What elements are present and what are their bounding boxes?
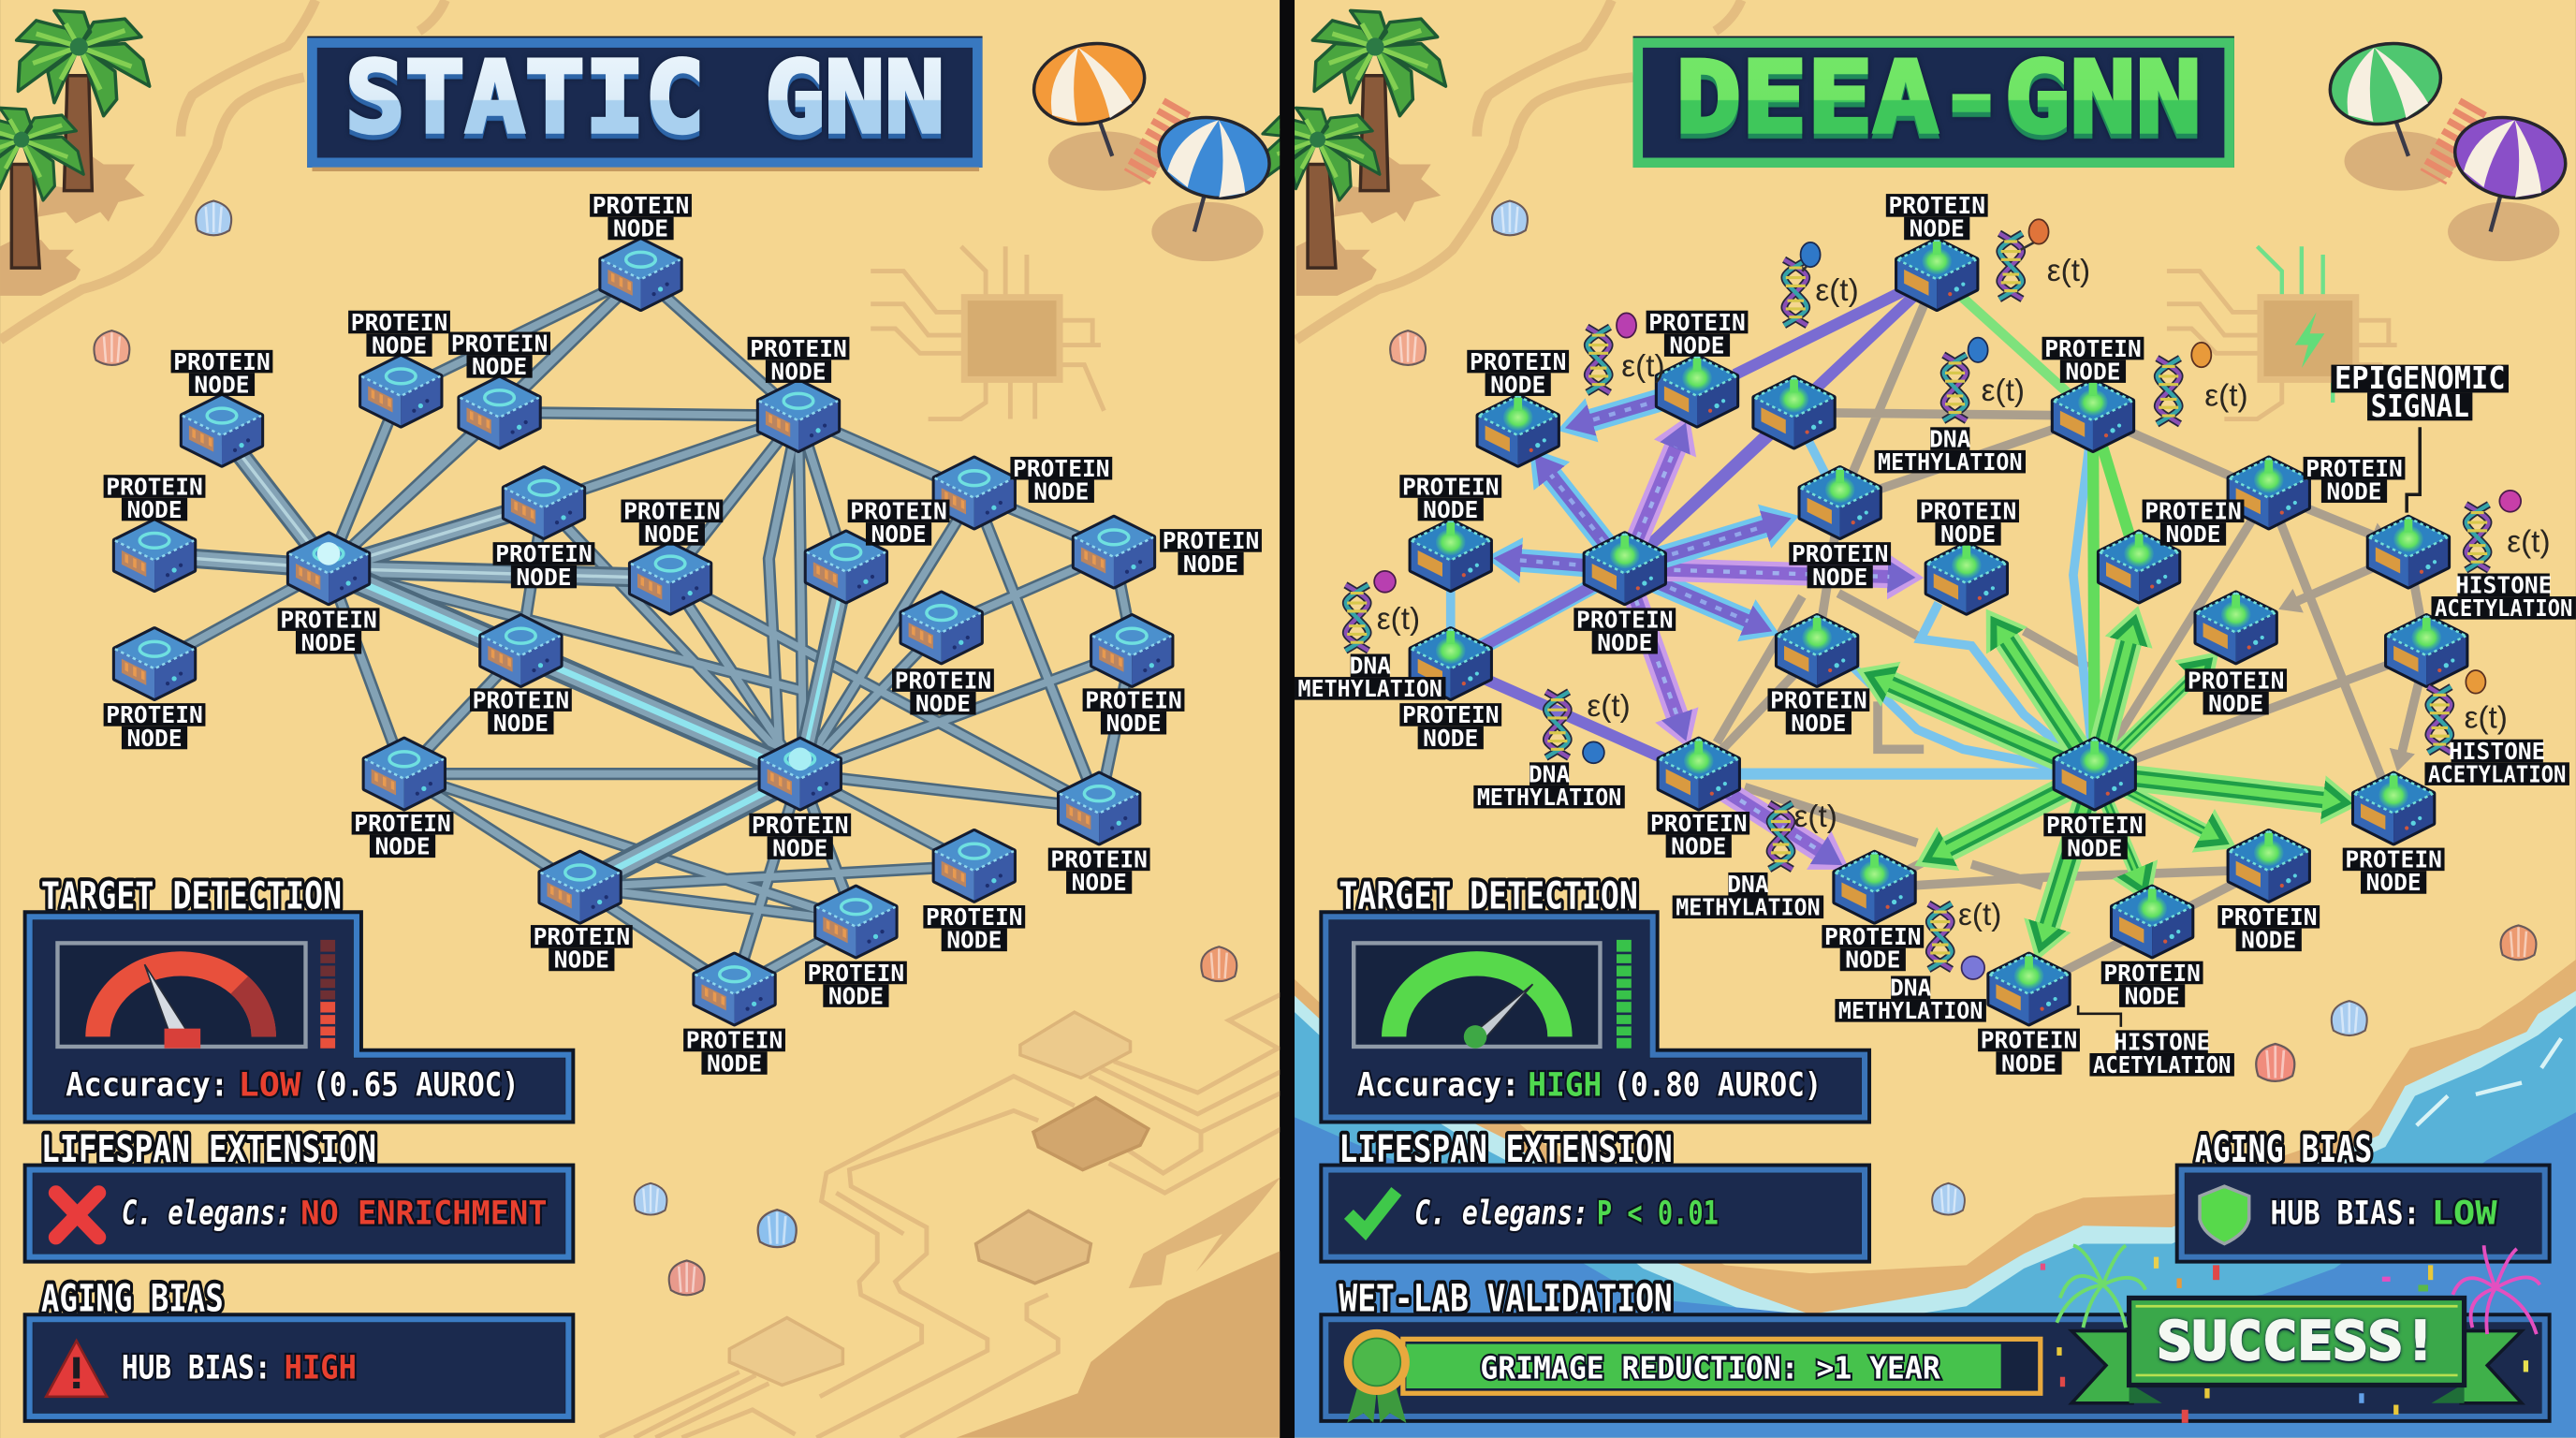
icon: warning triangle [46, 1341, 107, 1397]
node: right 14 [1767, 616, 1869, 737]
node: left 5: PROTEIN [750, 335, 847, 362]
circuit board traces left bottom [600, 994, 1281, 1438]
node: left 21: NODE [946, 927, 1002, 954]
network edges right: green links [1937, 274, 2139, 774]
text: elegans result: P < 0.01 [1597, 1194, 1719, 1232]
shells right [1390, 200, 2536, 1215]
node: left 12 [1075, 518, 1262, 587]
node: left 9: NODE [644, 521, 699, 548]
arrow: green to lower left [1947, 774, 2095, 849]
epigenomic marker: DNA 1: ε(t) [1815, 273, 1859, 308]
node: right 20: PROTEIN [1824, 923, 1922, 950]
panel: lifespan extension left [28, 1168, 570, 1258]
arrow: violet to top node [1625, 447, 1676, 568]
node: right 19 [2343, 774, 2445, 896]
node: right 9: PROTEIN [1920, 498, 2016, 525]
epigenomic marker: DNA 10 with histone label: ε(t) [2507, 525, 2551, 560]
palm trees left [0, 10, 150, 296]
node: left top: PROTEIN [593, 192, 689, 219]
icon: shield [2200, 1186, 2249, 1244]
node: left 23: NODE [707, 1049, 762, 1077]
label: histone acetylation lower: ACETYLATION [2093, 1051, 2231, 1078]
title banner: DEEA-GNN [1633, 37, 2234, 168]
text: hub bias low: HUB BIAS: [2271, 1194, 2420, 1232]
node: left 3: NODE [372, 331, 427, 359]
node: right 20: NODE [1845, 946, 1900, 974]
panel background: left sand [0, 0, 1280, 1438]
heading: lifespan extension left: LIFESPAN EXTENSION [41, 1127, 376, 1171]
epigenomic marker: DNA 3 [1587, 313, 1665, 392]
node: left 14 [470, 616, 572, 737]
arrow: green to left node [1889, 683, 2095, 774]
node: right 15 [2185, 594, 2287, 717]
text: hub bias high: HUB BIAS: [122, 1348, 271, 1387]
icon: green check [1349, 1191, 1397, 1231]
ocean: foam [1295, 990, 2576, 1438]
epigenomic marker: DNA 3: ε(t) [1621, 349, 1665, 384]
gauge frame [1354, 943, 1600, 1047]
node: left 17 [352, 740, 453, 860]
node: right 15: PROTEIN [2188, 667, 2284, 694]
node: left 15 [892, 594, 994, 717]
gauge arc [1382, 951, 1573, 1036]
node: right 7: NODE [1423, 496, 1478, 523]
node: left hub B [749, 740, 851, 861]
node: left 21: PROTEIN [926, 903, 1023, 931]
node: right 13 [1399, 629, 1501, 752]
node: right 5 [2042, 335, 2144, 450]
node: left 22: PROTEIN [808, 960, 904, 987]
node: right 2: NODE [1490, 371, 1545, 398]
arrow: violet to bottom node [1625, 568, 1677, 716]
network edges right: blue links [1451, 413, 2095, 774]
node: left 14: NODE [493, 710, 549, 737]
node: right 22: NODE [2125, 982, 2180, 1009]
accuracy text: Accuracy: [66, 1066, 228, 1105]
node: right 23: PROTEIN [1981, 1027, 2077, 1054]
node: left 21 [923, 831, 1025, 954]
bracket: epigenomic signal pointer [2407, 427, 2420, 513]
node: right 17: NODE [1671, 833, 1726, 860]
network edges left: thin links [154, 274, 1134, 990]
accuracy text: Accuracy: [1357, 1066, 1519, 1105]
progress bar track [1403, 1339, 2041, 1393]
ocean: shoreline wet sand [1295, 960, 2576, 1438]
epigenomic marker: DNA 1 [1784, 242, 1859, 325]
node: right 10: NODE [2326, 478, 2382, 506]
node: left 16 [1083, 616, 1184, 737]
icon: red cross [56, 1193, 98, 1238]
label: histone acetylation lower [2089, 1028, 2234, 1078]
label: epigenomic signal: EPIGENOMIC [2334, 360, 2505, 396]
epigenomic marker: DNA 10 with histone label: HISTONE [2455, 572, 2552, 599]
node: left 5 [748, 335, 849, 450]
node: right 13: PROTEIN [1402, 701, 1500, 728]
node: right 17: PROTEIN [1650, 810, 1748, 837]
node: right 22 [2101, 888, 2203, 1009]
node: right 10 [2230, 455, 2405, 527]
node: right 11 [2100, 498, 2244, 601]
arrow: green down right [2095, 774, 2136, 871]
panel divider [1280, 0, 1295, 1438]
right sand tracks [1296, 0, 1741, 340]
epigenomic marker: DNA 11 with histone label [2424, 670, 2569, 787]
node: left 15: PROTEIN [895, 667, 991, 694]
text: elegans result: NO ENRICHMENT [300, 1194, 547, 1232]
progress bar fill [1406, 1344, 2001, 1388]
epigenomic marker: DNA 11 with histone label: ACETYLATION [2428, 760, 2566, 787]
node: right top [1886, 192, 1988, 309]
node: left 20: PROTEIN [534, 923, 630, 950]
epigenomic marker: DNA 6 with methylation label: ε(t) [1377, 602, 1420, 637]
node: left 3 [348, 309, 450, 426]
arrow: green to upper-left node [2006, 639, 2095, 774]
panel: target detection right [1325, 916, 1866, 1119]
node: right hub B [2043, 740, 2145, 861]
epigenomic marker: DNA 9 with methylation label: METHYLATION [1838, 997, 1983, 1024]
panel: aging bias left [28, 1318, 570, 1418]
arrow: purple outer-left branch [1590, 399, 1662, 420]
node: left 13: PROTEIN [106, 701, 203, 728]
node: right 21 [2217, 831, 2320, 954]
node: left hub A: PROTEIN [280, 606, 377, 633]
left corner: sand wisps [1129, 1177, 1281, 1288]
node: left 9: PROTEIN [623, 498, 721, 525]
node: right 20 [1822, 853, 1924, 974]
node: right 22: PROTEIN [2103, 960, 2201, 987]
node: left 9 [621, 498, 723, 613]
label: histone acetylation lower: HISTONE [2114, 1028, 2210, 1055]
node: left 2 [171, 348, 272, 465]
ocean: wave highlights [2417, 1038, 2561, 1125]
bracket: histone acetylation pointer [2078, 1005, 2121, 1027]
text: elegans result: C. elegans: [122, 1194, 291, 1232]
heading: aging bias left: AGING BIAS [41, 1277, 224, 1321]
node: right 9: NODE [1940, 521, 1996, 548]
epigenomic marker: DNA 7 with methylation label [1473, 689, 1631, 811]
node: right 17 [1647, 740, 1749, 860]
epigenomic marker: DNA 8 with methylation label: METHYLATION [1676, 894, 1821, 921]
node: left 20 [531, 853, 633, 974]
node: right 10: PROTEIN [2305, 455, 2403, 482]
node: right hub A: NODE [1597, 629, 1652, 656]
gauge hub [1464, 1025, 1486, 1049]
arrow: green up [2095, 640, 2130, 774]
node: right 6 [1789, 468, 1891, 591]
node: left 13: NODE [126, 725, 183, 752]
epigenomic marker: DNA 11 with histone label: HISTONE [2449, 738, 2545, 765]
node: left hub B: NODE [772, 834, 827, 861]
node: left 12: PROTEIN [1163, 527, 1259, 554]
arrow: violet toward lower node [1699, 774, 1821, 851]
node: left 19: NODE [1072, 869, 1127, 896]
arrow: green to upper right [2095, 677, 2193, 774]
node: right 3: PROTEIN [1648, 309, 1746, 336]
node: right 9 [1917, 498, 2019, 613]
node: right top: PROTEIN [1888, 192, 1985, 219]
node: left 2: NODE [194, 371, 250, 398]
node: left 7: NODE [126, 496, 183, 523]
node: right 2 [1467, 348, 1569, 465]
shells left [94, 200, 1237, 1295]
beach umbrellas right [2322, 34, 2573, 261]
node: right 23 [1978, 955, 2080, 1077]
node: right 21: NODE [2241, 927, 2296, 954]
circuit chip background right [2167, 246, 2400, 419]
epigenomic marker: DNA 8 with methylation label [1673, 800, 1837, 921]
arrow: green to right node [2095, 774, 2324, 800]
accuracy text: (0.80 AUROC) [1613, 1066, 1822, 1105]
epigenomic marker: DNA 6 with methylation label: DNA [1350, 653, 1391, 680]
gauge needle [145, 964, 191, 1036]
node: left 7: PROTEIN [106, 473, 203, 500]
node: left 17: PROTEIN [354, 810, 451, 837]
gauge arc low end [230, 976, 276, 1036]
gauge frame [57, 943, 305, 1047]
node: right 14: NODE [1791, 710, 1846, 737]
panel: lifespan extension right [1325, 1168, 1866, 1258]
node: right 7: PROTEIN [1402, 473, 1500, 500]
epigenomic marker: DNA 2 [1999, 219, 2090, 299]
icon: medal [1344, 1329, 1410, 1423]
node: left 4 [448, 330, 550, 447]
heading: target detection left: TARGET DETECTION [41, 874, 342, 918]
title banner: DEEA-GNN: DEEA-GNN [1676, 39, 2202, 154]
epigenomic marker: DNA 9 with methylation label: ε(t) [1958, 898, 2001, 932]
node: left hub A [278, 534, 379, 656]
epigenomic marker: DNA 4 with methylation label: METHYLATION [1878, 448, 2022, 476]
epigenomic marker: DNA 2: ε(t) [2047, 254, 2090, 288]
node: left 16: PROTEIN [1085, 686, 1182, 713]
node: left 16: NODE [1105, 710, 1162, 737]
gauge needle [1467, 984, 1532, 1038]
node: left 10 [935, 455, 1112, 527]
node: right 11: PROTEIN [2144, 498, 2242, 525]
epigenomic marker: DNA 8 with methylation label: DNA [1727, 871, 1769, 898]
arrow: purple to upper-left node [1551, 475, 1625, 568]
node: left 10: NODE [1033, 478, 1089, 506]
ribbon: success tails [2071, 1331, 2522, 1403]
epigenomic marker: DNA 4 with methylation label [1875, 338, 2026, 476]
node: right 5: PROTEIN [2044, 335, 2142, 362]
node: right 3 [1647, 309, 1748, 426]
node: right 12 [2369, 518, 2448, 587]
node: right top: NODE [1910, 215, 1965, 242]
epigenomic marker: DNA 7 with methylation label: METHYLATION [1477, 784, 1621, 811]
heading: aging bias right: AGING BIAS [2195, 1127, 2372, 1171]
left corner: wet sand [956, 1251, 1281, 1438]
epigenomic marker: DNA 5: ε(t) [2204, 378, 2248, 413]
node: left hub B: PROTEIN [752, 812, 849, 839]
node: right 2: PROTEIN [1470, 348, 1566, 375]
accuracy text: HIGH [1528, 1066, 1602, 1105]
node: left 10: PROTEIN [1013, 455, 1110, 482]
node: right 19: PROTEIN [2345, 846, 2442, 873]
panel: aging bias right [2180, 1168, 2546, 1258]
epigenomic marker: DNA 10 with histone label [2431, 491, 2576, 622]
gauge arc [85, 951, 276, 1036]
left sand tracks [0, 0, 446, 340]
heading: lifespan extension right: LIFESPAN EXTENSION [1339, 1127, 1673, 1171]
node: right hub A [1573, 534, 1676, 656]
text: elegans result: C. elegans: [1414, 1194, 1588, 1232]
node: left 2: PROTEIN [173, 348, 271, 375]
node: left 23: PROTEIN [686, 1027, 783, 1054]
node: left 4: PROTEIN [451, 330, 548, 358]
epigenomic marker: DNA 4 with methylation label: DNA [1929, 425, 1971, 452]
node: left 20: NODE [554, 946, 609, 974]
node: right hub B: NODE [2067, 834, 2122, 861]
node: left 6: PROTEIN [495, 540, 593, 567]
node: left 15: NODE [915, 690, 971, 717]
epigenomic marker: DNA 7 with methylation label: ε(t) [1587, 689, 1631, 724]
text: hub bias high: HIGH [285, 1348, 357, 1387]
node: right 11: NODE [2165, 521, 2221, 548]
node: left 14: PROTEIN [473, 686, 569, 713]
node: right 5: NODE [2065, 358, 2121, 385]
node: right 23: NODE [2001, 1049, 2056, 1077]
node: left 11 [807, 498, 949, 601]
text: hub bias low: LOW [2431, 1194, 2498, 1232]
epigenomic marker: DNA 5 [2157, 343, 2248, 424]
arrow: blue to upper-right node [1625, 526, 1766, 568]
ocean: deep water [1295, 1112, 2576, 1438]
network edges right: purple links [1451, 274, 1937, 774]
epigenomic marker: DNA 9 with methylation label: DNA [1890, 975, 1932, 1002]
epigenomic marker: DNA 9 with methylation label [1835, 898, 2001, 1024]
node: right 13: NODE [1423, 725, 1478, 752]
epigenomic marker: DNA 6 with methylation label: METHYLATION [1298, 675, 1442, 702]
confetti [2041, 1257, 2528, 1423]
node: right 6: NODE [1812, 564, 1867, 591]
badge: success [2130, 1298, 2465, 1385]
node: left 7 [104, 473, 205, 590]
epigenomic marker: DNA 11 with histone label: ε(t) [2465, 700, 2508, 735]
label: epigenomic signal [2331, 360, 2509, 424]
LED level bar [320, 940, 335, 1049]
arrow: green to lower right [2095, 774, 2204, 831]
LED level bar [1617, 940, 1632, 1049]
accuracy text: LOW [239, 1066, 301, 1105]
node: right 4 [1754, 378, 1834, 447]
arrow: purple to lower-right node [1625, 568, 1748, 621]
epigenomic marker: DNA 6 with methylation label [1295, 571, 1445, 702]
node: left top [590, 192, 692, 309]
network edges left: thick hub links [154, 431, 846, 888]
node: left 22: NODE [828, 982, 884, 1009]
node: left 17: NODE [374, 833, 431, 860]
arrow: green down [2047, 774, 2095, 927]
node: left 4: NODE [472, 353, 527, 380]
heading: wet-lab validation: WET-LAB VALIDATION [1339, 1277, 1673, 1321]
node: right 15: NODE [2208, 690, 2263, 717]
epigenomic marker: DNA 4 with methylation label: ε(t) [1982, 374, 2025, 408]
node: right 16 [2387, 616, 2466, 685]
node: left top: NODE [613, 215, 668, 242]
node: left 6 [493, 468, 594, 591]
title banner: Static GNN: STATIC GNN [345, 39, 944, 154]
epigenomic marker: DNA 7 with methylation label: DNA [1529, 760, 1570, 787]
circuit chip background left [871, 246, 1104, 419]
node: right 14: PROTEIN [1770, 686, 1867, 713]
badge: success: SUCCESS! [2157, 1311, 2438, 1372]
node: right 21: PROTEIN [2220, 903, 2318, 931]
label: epigenomic signal: SIGNAL [2371, 388, 2469, 424]
network edges right: gray links [1699, 274, 2426, 990]
text: grimage reduction: GRIMAGE REDUCTION: >1 YEAR [1480, 1349, 1941, 1386]
panel: wet-lab validation [1325, 1318, 2546, 1423]
panel: target detection left [28, 916, 570, 1119]
fireworks: pink [2452, 1245, 2539, 1334]
node: left 19: PROTEIN [1050, 846, 1148, 873]
node: left hub A: NODE [300, 629, 357, 656]
node: left 13 [104, 629, 205, 752]
node: right 19: NODE [2366, 869, 2422, 896]
epigenomic marker: DNA 8 with methylation label: ε(t) [1794, 800, 1837, 834]
node: left 3: PROTEIN [351, 309, 447, 336]
node: right 7 [1399, 473, 1501, 590]
node: left 23 [683, 955, 785, 1077]
node: right hub A: PROTEIN [1576, 606, 1674, 633]
node: right hub B: PROTEIN [2046, 812, 2143, 839]
arrow: violet to right node [1625, 568, 1889, 577]
node: left 5: NODE [770, 358, 827, 385]
fireworks: green [2056, 1245, 2145, 1328]
node: left 19 [1048, 774, 1150, 896]
node: left 11: NODE [871, 521, 927, 548]
node: left 12: NODE [1183, 550, 1238, 578]
node: left 6: NODE [516, 564, 572, 591]
beach umbrellas left [1027, 34, 1277, 261]
panel background: right sand [1295, 0, 2576, 1438]
gauge hub [165, 1029, 200, 1049]
node: left 22 [805, 888, 907, 1009]
ocean: shallow water [1295, 1005, 2576, 1438]
palm trees right [1263, 10, 1445, 296]
accuracy text: (0.65 AUROC) [313, 1066, 520, 1105]
heading: target detection right: TARGET DETECTION [1339, 874, 1638, 918]
node: left 11: PROTEIN [850, 498, 947, 525]
node: right 6: PROTEIN [1792, 540, 1888, 567]
arrow: purple to left node [1519, 560, 1625, 568]
node: right 3: NODE [1669, 331, 1725, 359]
